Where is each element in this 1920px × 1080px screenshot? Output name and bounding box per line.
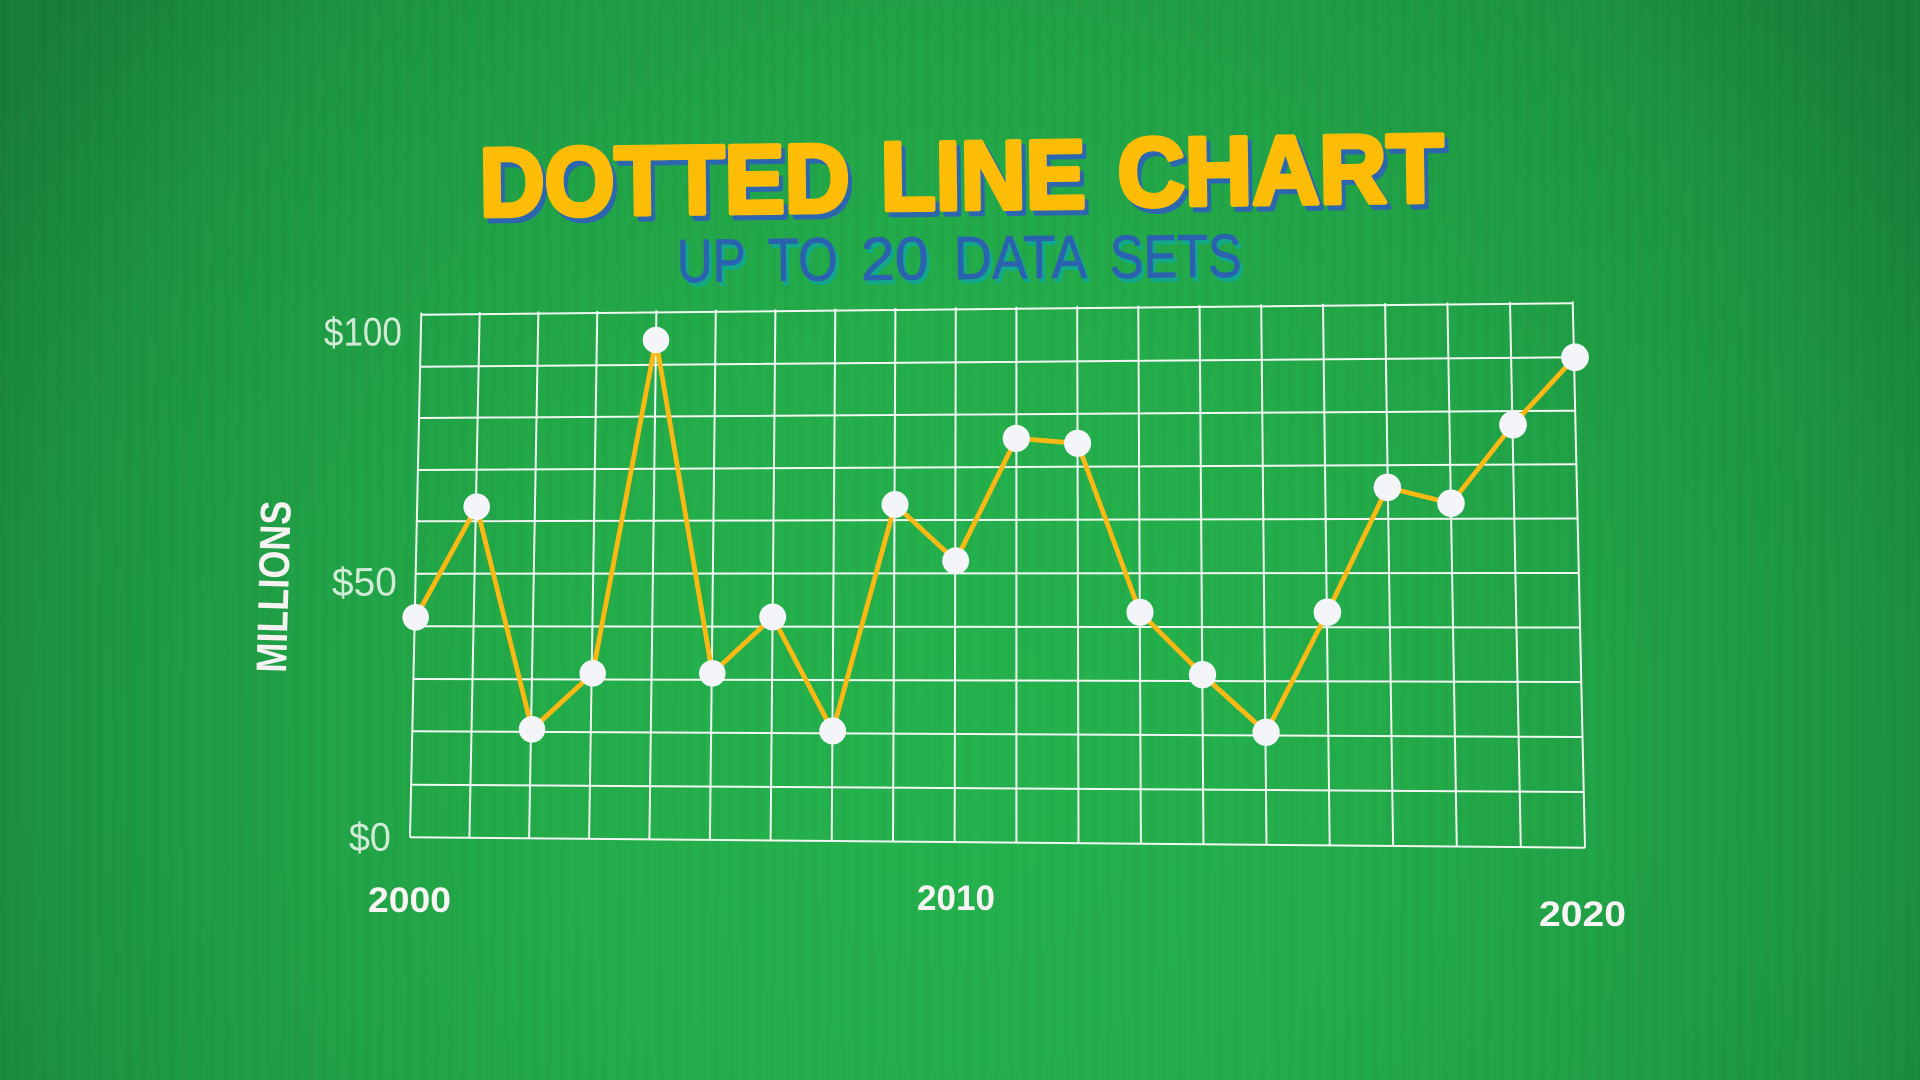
title bbox=[479, 113, 1444, 237]
subtitle: TO bbox=[767, 225, 838, 294]
data line bbox=[416, 340, 1575, 732]
label: $100: $100 bbox=[324, 310, 402, 355]
title: LINE bbox=[880, 120, 1086, 231]
y-axis title: MILLIONS bbox=[248, 500, 301, 673]
label: 2020: 2020 bbox=[1539, 895, 1626, 934]
grid bbox=[410, 301, 1585, 848]
subtitle bbox=[676, 222, 1242, 295]
title: CHART bbox=[1117, 113, 1444, 227]
label: 2000: 2000 bbox=[368, 881, 451, 920]
title: DOTTED bbox=[479, 123, 850, 237]
data points bbox=[402, 327, 1589, 746]
subtitle: 20 bbox=[860, 224, 929, 293]
label: 2010: 2010 bbox=[917, 879, 995, 918]
subtitle: UP bbox=[676, 226, 746, 295]
x-axis labels bbox=[368, 879, 1626, 934]
subtitle: SETS bbox=[1109, 222, 1242, 291]
subtitle: DATA bbox=[953, 223, 1087, 292]
label: $0: $0 bbox=[349, 816, 391, 860]
label: $50: $50 bbox=[332, 560, 397, 605]
y-axis labels bbox=[324, 310, 402, 860]
